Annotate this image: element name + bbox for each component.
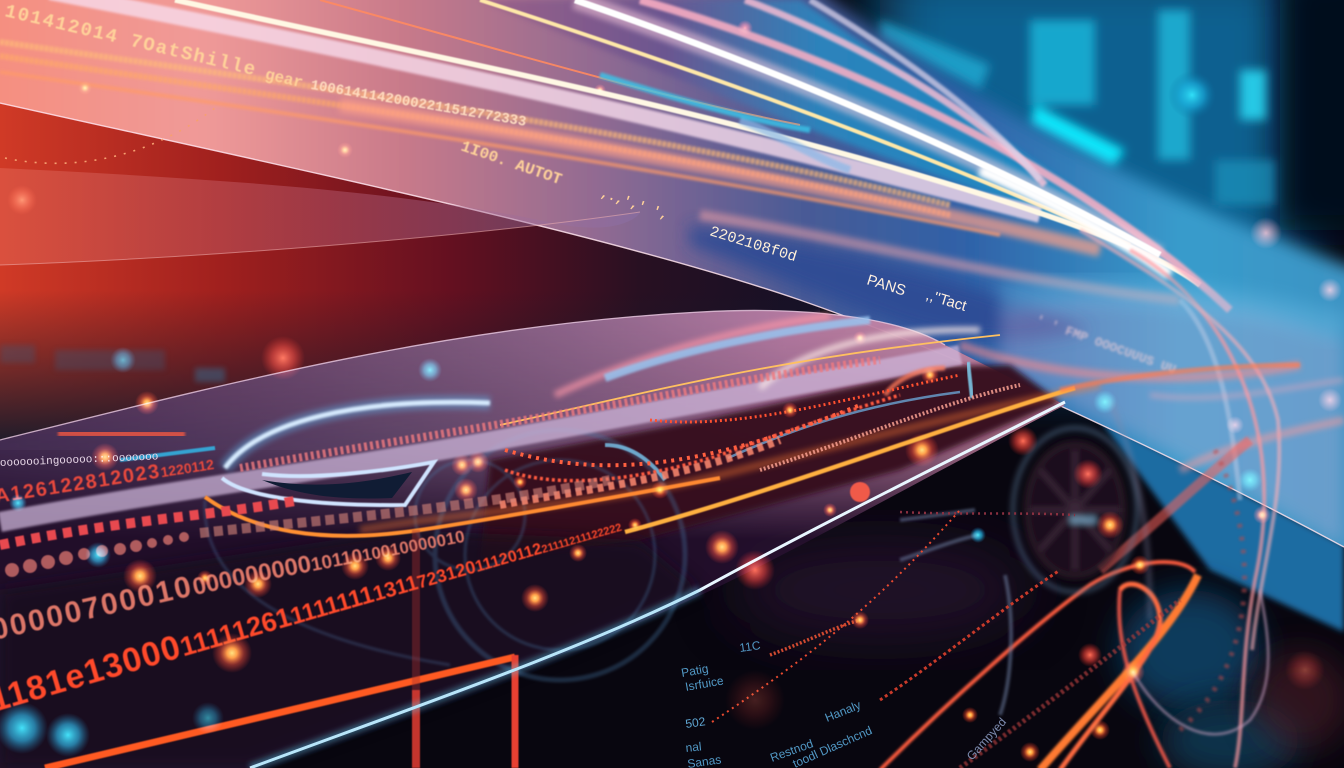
- frame: orange line and red uprights: [45, 530, 515, 768]
- data row: small digits: ooooooingooooo:::ooooooo: [0, 454, 158, 466]
- panel: blurred blue screen in the top right: [880, 10, 1275, 205]
- data label: faded text on right: ' ' FMP OOOCUUUS UU: [1034, 313, 1178, 377]
- data label: top digits: 101412014 7OatShille: [5, 4, 255, 74]
- binary digit rows: [0, 454, 622, 711]
- dotted curve in the red area: [5, 108, 215, 163]
- data row: pink digits: A1261228120231220112: [0, 459, 215, 502]
- data label: dashes after AUTOT: ,.,',' ',: [599, 186, 670, 223]
- text: 11C: 11C: [738, 638, 762, 655]
- panel: second red glass pane on the left: [0, 168, 640, 265]
- glow particles: blue: [0, 347, 1262, 757]
- text: Patig: Patig: [680, 661, 709, 680]
- data label: 2202108f0d: 2202108f0d: [708, 224, 799, 266]
- panel: ribbon navy inner shade: [690, 225, 1090, 341]
- icon: headlight: [222, 402, 490, 505]
- data label: Tact: ,,''Tact: [924, 287, 969, 315]
- icon: front wheel: [415, 430, 685, 680]
- icon: hood light band: [0, 355, 960, 522]
- icon: upper light trails: [555, 316, 830, 395]
- dotted trails: [712, 510, 960, 722]
- data row: bead dots: [5, 480, 610, 577]
- white light line along glass edge: [250, 402, 1065, 768]
- panel: lower glass top edge: [0, 310, 945, 440]
- panel: opening under hood with dark red interior: [480, 365, 1060, 560]
- text: 502: 502: [684, 714, 707, 731]
- icon: bumper curve: [205, 500, 450, 665]
- upper ribbon text: [5, 4, 1178, 400]
- panel: upper translucent ribbon: [0, 0, 1344, 547]
- data label: PANS: PANS: [865, 272, 908, 299]
- panel: pane lower edge: [0, 212, 640, 265]
- icon: lower right orange curves: [880, 440, 1268, 768]
- icon: orange light line: [205, 478, 720, 536]
- text: Hanaly: Hanaly: [823, 698, 863, 725]
- text: nal: nal: [685, 739, 702, 755]
- data label: 1I00 AUTOT: 1I00. AUTOT: [458, 138, 564, 189]
- text: Gampyed: Gampyed: [964, 715, 1009, 763]
- data label: top digits: 10061411420002211512772333: [310, 80, 526, 126]
- panel: lavender glass at right: [1000, 296, 1344, 547]
- panel: ribbon lower edge highlight: [0, 103, 1344, 547]
- text: Isrfuice: Isrfuice: [684, 673, 725, 694]
- blue terminal text bottom centre: [680, 638, 1009, 768]
- blue blurred bars on dark left background: [0, 345, 225, 382]
- icon: side skirt streaks: [900, 510, 1011, 715]
- icon: rear wheel: [1013, 400, 1150, 620]
- glow particle: solid red dot: [850, 482, 870, 502]
- data label: top digits: gear: [265, 70, 303, 86]
- white edge glow: [250, 590, 700, 768]
- panel: wedge between light streaks: [490, 0, 1126, 232]
- panel: lower glass dark tint: [0, 310, 1065, 768]
- illustration: car outline: [0, 316, 1300, 768]
- data row: pale digits: 000007000100000000001011010010000010: [0, 530, 465, 640]
- panel: dark lower left: [0, 530, 700, 768]
- orange data stripes in the ribbon: [0, 42, 1180, 300]
- text: Restnod: Restnod: [768, 736, 815, 765]
- data row: red digits: 1181e1300011111261111111113117231201112011221111211122222: [0, 522, 622, 711]
- panel: lower glass pane: [0, 310, 1065, 532]
